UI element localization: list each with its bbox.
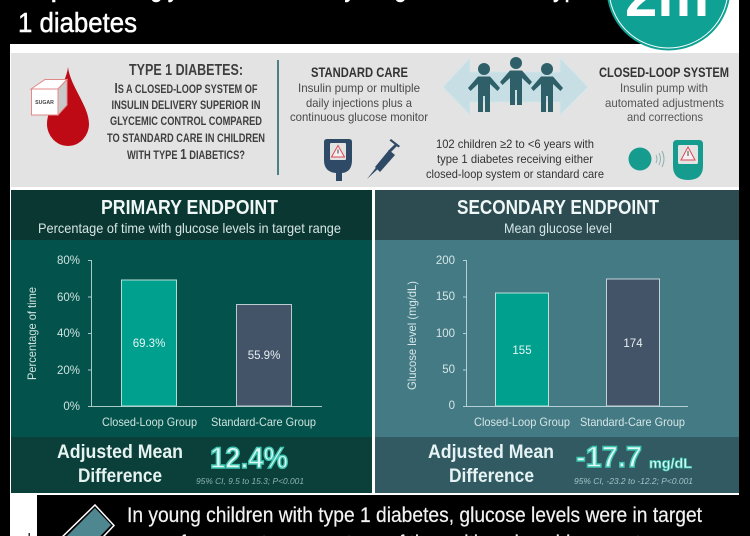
header: primary endpoint: Percentage of time with glucose levels in target range [38,220,341,236]
icon: conclusion marker [58,505,114,536]
text block: study population: 102 children ≥2 to <6 years with [436,137,594,151]
text block: closed-loop system: automated adjustments [605,96,724,110]
text block: closed-loop system: Insulin pump with [620,81,708,95]
bar chart: primary endpoint: Closed-Loop Group [102,415,197,429]
icon: syringe [367,139,400,179]
panel: study overview [11,53,739,187]
bar chart: secondary endpoint: Closed-Loop Group [474,415,570,429]
bar chart: primary endpoint: Standard-Care Group [211,415,316,429]
icon: blood drop with sugar cube [31,67,89,146]
bar chart: secondary endpoint: Glucose level (mg/dL) [405,281,419,390]
bar: closed-loop 69.3%: 69.3% [133,338,165,350]
bar: closed-loop 69.3% [122,280,176,406]
icon: blood drop with sugar cube: SUGAR [35,100,54,106]
bar: closed-loop 155 [496,293,548,406]
callout: primary adjusted mean difference: Adjusted Mean [57,442,183,463]
callout: primary adjusted mean difference: 95% CI, 9.5 to 15.3; P<0.001 [196,477,304,486]
title: 1 diabetes [18,7,137,38]
header: primary endpoint: PRIMARY ENDPOINT [101,197,278,219]
bar: standard care 174: 174 [623,338,643,350]
text block: standard care: continuous glucose monitor [290,110,428,124]
text block: standard care: STANDARD CARE [311,64,408,80]
callout: secondary adjusted mean difference [375,437,739,493]
text block: standard care: daily injections plus a [306,96,412,110]
callout: secondary adjusted mean difference: 95% CI, -23.2 to -12.2; P<0.001 [574,477,693,486]
bar chart: secondary endpoint: 200 [436,255,455,267]
text block: closed-loop system: and corrections [627,110,703,124]
icon: glucose monitor [324,139,352,181]
text block: study question [107,62,265,163]
text block: standard care [290,64,428,124]
bar chart: secondary endpoint: Standard-Care Group [580,415,685,429]
text block: study population [426,137,604,181]
bar chart: primary endpoint: 0% [63,401,80,413]
text block: study question: TYPE 1 DIABETES: [129,62,243,79]
bar chart: secondary endpoint: 150 [436,291,455,303]
callout: secondary adjusted mean difference: mg/dL [649,455,692,471]
arrow: double-headed comparison [443,58,588,115]
logo: 2m badge [606,0,730,50]
bar: standard care 174 [606,279,660,406]
callout: primary adjusted mean difference: Difference [78,466,162,487]
callout: secondary adjusted mean difference: Difference [449,466,534,487]
bar chart: secondary endpoint: 100 [436,328,455,340]
text block: study question: INSULIN DELIVERY SUPERIOR IN [112,100,260,112]
panel: conclusion [28,495,750,536]
bar chart: primary endpoint [25,255,322,429]
bar: standard care 55.9%: 55.9% [248,350,280,362]
text block: study population: closed-loop system or standard care [426,167,604,181]
header: secondary endpoint: SECONDARY ENDPOINT [457,197,659,219]
icon: closed-loop sensor and pump [628,140,703,180]
text block: study question: GLYCEMIC CONTROL COMPARED [110,116,262,128]
panel: primary endpoint [11,190,372,493]
callout: secondary adjusted mean difference: -17.7 [576,441,642,474]
bar: closed-loop 155: 155 [512,345,532,357]
text block: study question: WITH TYPE 1 DIABETICS? [127,147,245,163]
title [18,0,590,38]
callout: primary adjusted mean difference: 12.4% [210,442,288,475]
bar chart: primary endpoint: 60% [57,292,80,304]
callout: secondary adjusted mean difference: Adjusted Mean [428,442,554,463]
bar chart: primary endpoint: 40% [57,328,80,340]
text block: closed-loop system [599,64,729,124]
header: secondary endpoint [375,190,739,240]
text block: standard care: Insulin pump or multiple [298,81,420,95]
bar chart: primary endpoint: 80% [57,255,80,267]
header: primary endpoint [11,190,372,240]
text block: conclusion [127,504,702,536]
bar chart: secondary endpoint: 50 [442,364,455,376]
text block: study population: type 1 diabetes receiving either [437,152,593,166]
callout: primary adjusted mean difference [11,437,372,493]
header: secondary endpoint: Mean glucose level [504,220,612,236]
panel: secondary endpoint [375,190,739,493]
icon: three children [468,57,563,112]
bar chart: secondary endpoint [405,255,688,429]
text block: conclusion: In young children with type 1 diabetes, glucose levels were in target [127,504,702,527]
bar chart: secondary endpoint: 0 [449,400,455,412]
bar chart: primary endpoint: Percentage of time [25,287,39,380]
bar: standard care 55.9% [236,304,292,406]
bar chart: primary endpoint: 20% [57,365,80,377]
text block: study question: TO STANDARD CARE IN CHILDREN [107,133,265,145]
text block: study question: IS A CLOSED-LOOP SYSTEM OF [114,81,258,97]
